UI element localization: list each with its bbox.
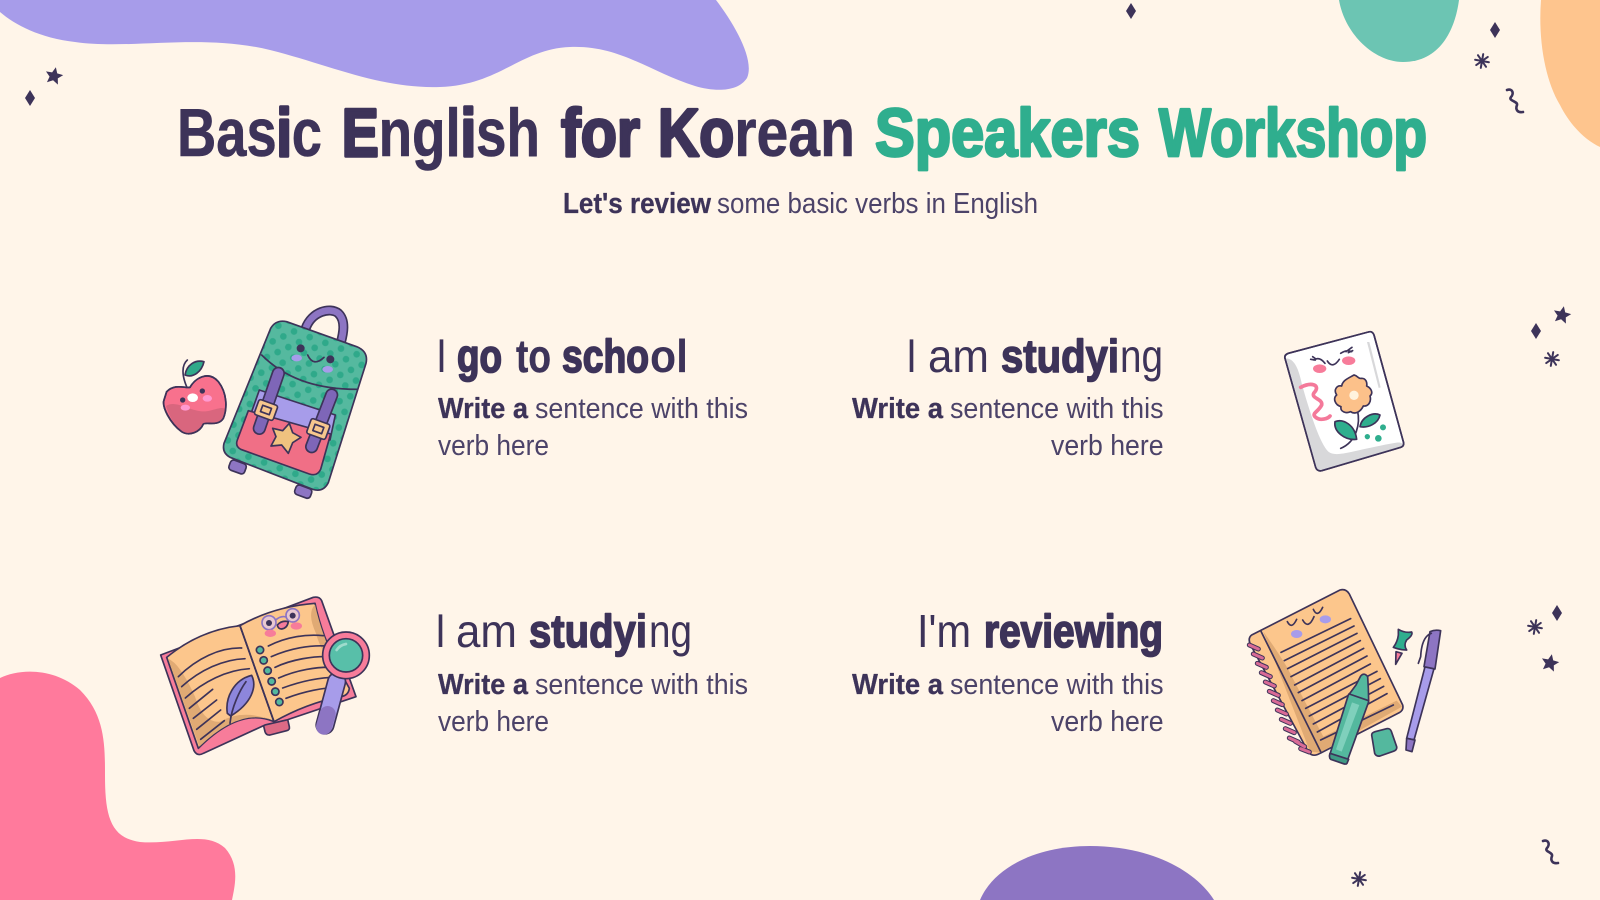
text block: I go to school: to <box>516 330 551 382</box>
text block: I am studying top right: studyi <box>1001 330 1119 382</box>
text block: I am studying bottom left: Write a <box>438 669 529 701</box>
icon: backpack <box>223 310 366 499</box>
blob: purple top left <box>0 0 749 90</box>
book leaf <box>227 675 254 723</box>
backpack straps <box>259 373 332 447</box>
subtitle: Let's review <box>563 188 711 220</box>
book left text lines <box>178 648 249 739</box>
book cover <box>161 597 356 755</box>
text block: I go to school: ol <box>650 330 688 382</box>
pen <box>1406 630 1441 752</box>
title: for <box>561 95 640 171</box>
blob: orange right <box>1540 0 1600 147</box>
subtitle <box>563 188 1038 220</box>
backpack body <box>223 321 366 490</box>
icon: open book with magnifier <box>161 597 369 755</box>
title: Korean <box>658 95 855 171</box>
text block: I am studying bottom left: studyi <box>529 605 647 657</box>
text block: I am studying top right: verb here <box>1051 430 1164 462</box>
blob: purple bottom <box>980 846 1214 900</box>
notebook rings <box>1249 645 1309 752</box>
text block: I go to school: scho <box>562 330 649 382</box>
backpack face <box>291 344 334 373</box>
push pin <box>1393 629 1412 664</box>
title: Speakers <box>875 95 1140 171</box>
backpack handle <box>306 310 343 343</box>
text block: I go to school <box>438 329 748 462</box>
text block: I am studying top right: ng <box>1120 330 1163 382</box>
backpack wheels <box>228 459 313 499</box>
text block: I am studying bottom left: am <box>456 605 517 657</box>
backpack buckles <box>254 399 330 440</box>
text block: I am studying bottom left: sentence with this <box>535 669 748 701</box>
notebook face <box>1287 607 1331 638</box>
text block: I go to school: go <box>457 330 502 382</box>
text block: I am studying bottom left <box>437 604 748 738</box>
text block: I go to school: I <box>438 329 445 382</box>
text block: I am studying bottom left: verb here <box>438 706 549 738</box>
title <box>177 95 1427 171</box>
icon: kawaii drawing card <box>1285 332 1404 471</box>
backpack pocket <box>237 390 335 475</box>
text block: I'm reviewing: verb here <box>1051 706 1164 738</box>
text block: I am studying top right: sentence with this <box>950 393 1164 425</box>
marker cap <box>1372 729 1397 756</box>
text block: I am studying bottom left: I <box>437 604 444 657</box>
text block: I'm reviewing: reviewing <box>984 605 1163 657</box>
card face <box>1311 347 1355 373</box>
title: English <box>342 95 540 171</box>
blob: teal top right <box>1339 0 1459 62</box>
book face <box>262 609 302 637</box>
book dots <box>256 646 283 706</box>
book right text lines <box>268 635 340 698</box>
magnifier <box>323 632 369 727</box>
icon: apple <box>164 360 226 434</box>
text block: I go to school: sentence with this <box>535 393 748 425</box>
backpack star <box>271 423 301 453</box>
notebook page <box>1249 590 1403 755</box>
title: Workshop <box>1159 95 1427 171</box>
blob: pink bottom left <box>0 672 235 900</box>
text block: I'm reviewing: sentence with this <box>950 669 1164 701</box>
text block: I go to school: verb here <box>438 430 549 462</box>
marker <box>1329 674 1369 764</box>
text block: I'm reviewing: Write a <box>852 669 944 701</box>
title: Basic <box>177 95 322 171</box>
book pages <box>167 603 349 748</box>
subtitle: some basic verbs in English <box>717 188 1038 220</box>
icon: spiral notebook with marker and pen <box>1249 590 1441 764</box>
notebook lines <box>1281 619 1393 740</box>
text block: I'm reviewing: I'm <box>917 605 971 657</box>
text block: I go to school: Write a <box>438 393 529 425</box>
text block: I am studying top right: Write a <box>852 393 944 425</box>
card squiggle <box>1301 384 1330 419</box>
text block: I'm reviewing <box>852 605 1164 738</box>
text block: I am studying top right: am <box>928 330 989 382</box>
text block: I am studying top right <box>852 329 1164 462</box>
text block: I am studying top right: I <box>908 329 915 382</box>
card flower <box>1335 375 1386 448</box>
text block: I am studying bottom left: ng <box>649 605 692 657</box>
